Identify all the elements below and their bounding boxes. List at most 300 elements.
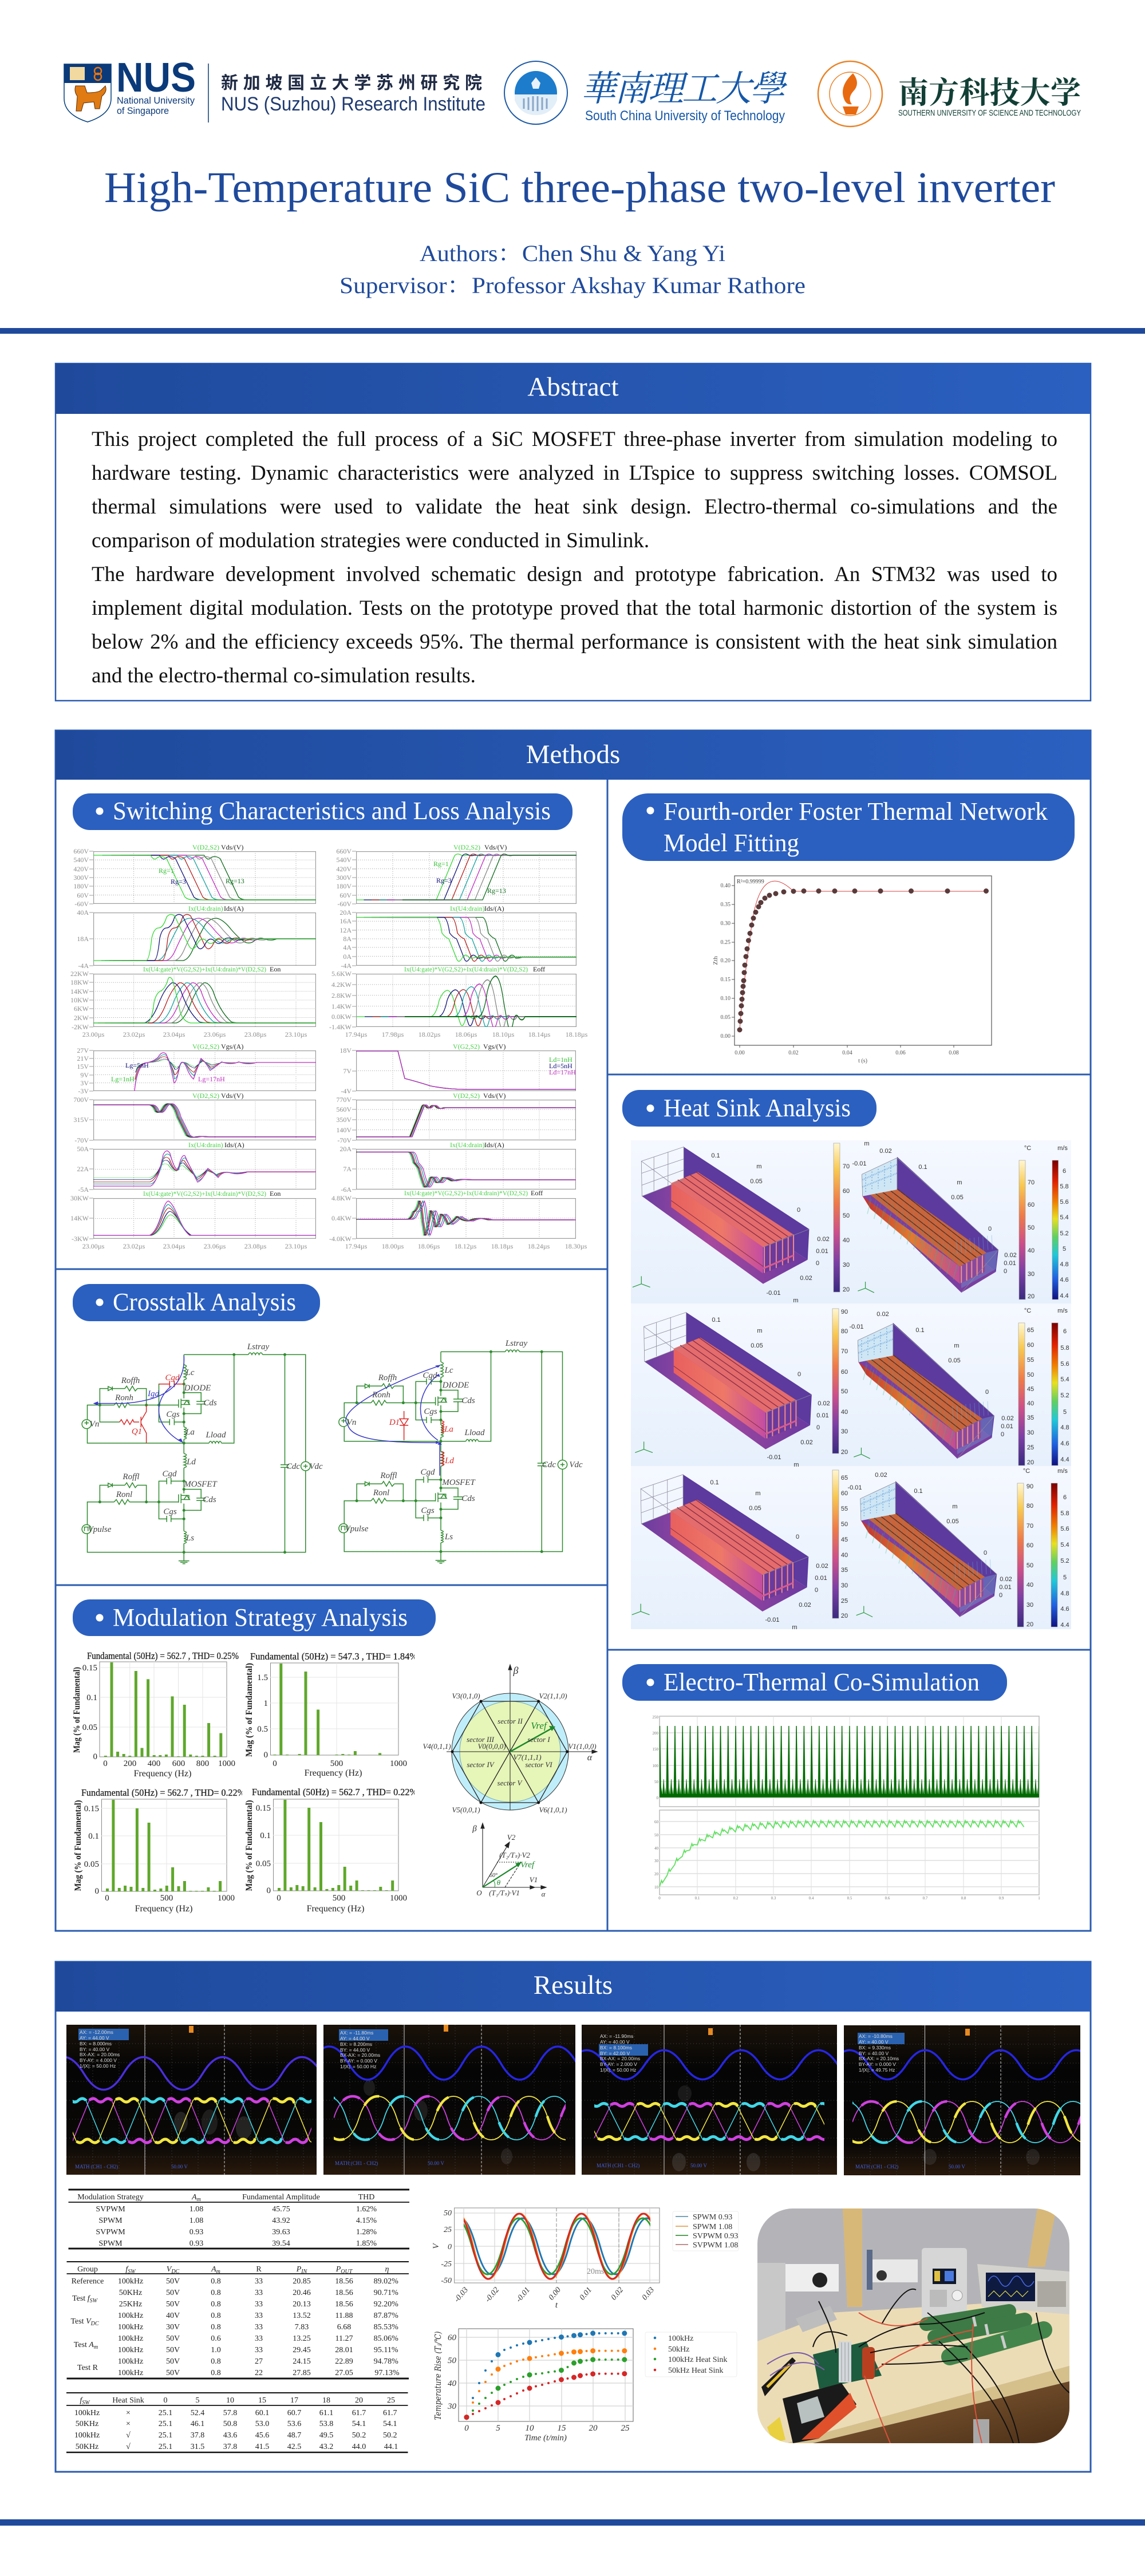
chart: turn-off waveforms vs Ld: Ids/(A)	[484, 1141, 504, 1149]
bar chart: harmonic spectrum 3: 0	[105, 1894, 109, 1903]
line chart: junction temperature rise: 0.9	[999, 1896, 1004, 1901]
table: modulation strategy comparison: Modulation Strategy	[77, 2193, 144, 2202]
table: efficiency test groups: V	[167, 2265, 172, 2274]
legend: modulation waveforms: SVPWM 0.93	[693, 2232, 738, 2241]
oscilloscope capture 1: BY-AY: = 4.000 V	[80, 2057, 117, 2063]
oscilloscope capture 4: BY-AY: = 0.000 V	[859, 2061, 896, 2067]
bar chart: harmonic spectrum 2: 500	[330, 1759, 343, 1768]
pill heading: Electro-Thermal Co-Simulation	[664, 1668, 980, 1696]
circuit diagram: left crosstalk path: Cgd	[162, 1469, 177, 1479]
figure: COMSOL heat sink simulations: 60	[841, 1490, 848, 1497]
circuit diagram: left crosstalk path: Ld	[186, 1457, 196, 1467]
oscilloscope capture 4: MATH (CH1 - CH2)	[855, 2164, 898, 2170]
oscilloscope capture 1: BX: = 8.000ms	[80, 2041, 112, 2046]
line chart: junction power losses: 100	[653, 1764, 658, 1768]
chart: turn-off waveforms vs Ld: 0.4KW	[331, 1214, 352, 1222]
table: temperature rise over time: 46.1	[191, 2420, 204, 2428]
chart: turn-off waveforms vs Ld: 7V	[343, 1067, 352, 1075]
oscilloscope capture 1	[66, 2025, 317, 2175]
figure: COMSOL heat sink simulations: 90	[1026, 1483, 1033, 1490]
chart: turn-off waveforms vs Rg: 17.94µs	[345, 1030, 368, 1038]
figure: COMSOL heat sink simulations: 0	[988, 1226, 992, 1232]
table: efficiency test groups: 1.0	[211, 2346, 221, 2354]
figure: COMSOL heat sink simulations: 0	[815, 1587, 818, 1594]
chart: turn-off waveforms vs Ld: -4.0KW	[329, 1235, 352, 1243]
title: High-Temperature SiC three-phase two-level inverter	[104, 164, 1055, 212]
figure: COMSOL heat sink simulations: °C	[1024, 1145, 1031, 1152]
oscilloscope capture 4	[844, 2025, 1080, 2175]
table: efficiency test groups: m	[216, 2269, 220, 2275]
chart: turn-off waveforms vs Rg: Ix(U4:drain)	[450, 904, 485, 912]
table: temperature rise over time: 0	[164, 2396, 167, 2405]
pill heading	[73, 1599, 436, 1636]
chart: turn-off waveforms vs Rg: 20A	[339, 908, 352, 916]
bar chart: harmonic spectrum 1: Frequency (Hz)	[134, 1769, 191, 1779]
subpanel: electro-thermal co-simulation	[622, 1664, 1040, 1901]
oscilloscope capture 3: BY: = 42.00 V	[600, 2050, 630, 2056]
table: efficiency test groups: 20.13	[293, 2300, 311, 2309]
text block: abstract: below 2% and the efficiency exceeds 95%. The thermal performance is consistent with the heat sink simulation	[92, 630, 1057, 654]
table: modulation strategy comparison: THD	[358, 2193, 374, 2202]
oscilloscope capture 2: 1/|X|: = 50.00 Hz	[340, 2064, 376, 2069]
table: temperature rise over time: 100kHz	[74, 2431, 100, 2440]
table: efficiency test groups: DC	[90, 2321, 99, 2327]
table: temperature rise over time: 5	[196, 2396, 199, 2405]
circuit diagram: right crosstalk path	[339, 1339, 583, 1563]
diagram: vector synthesis: 60°	[489, 1872, 498, 1879]
figure: COMSOL heat sink simulations: 45	[1027, 1386, 1034, 1393]
figure: COMSOL heat sink simulations: 0.02	[1004, 1252, 1017, 1259]
text block: abstract: hardware testing. Dynamic characteristics were analyzed in LTspice to suppress switching losses. COMSOL	[92, 461, 1057, 485]
diagram: space vector hexagon: V3(0,1,0)	[452, 1692, 480, 1700]
oscilloscope capture 2: BX: = 8.200ms	[340, 2041, 372, 2047]
diagram: vector synthesis: θ	[497, 1878, 501, 1887]
figure: COMSOL heat sink simulations: m	[954, 1342, 960, 1349]
figure: COMSOL heat sink simulations: 0	[816, 1424, 820, 1431]
text block: abstract: The hardware development involved schematic design and prototype fabrication. An STM32 was used to	[92, 563, 1057, 586]
oscilloscope capture 4: BX: = 9.330ms	[859, 2045, 891, 2050]
chart: turn-on waveforms vs Lg: 14KW	[70, 1214, 89, 1222]
figure: COMSOL heat sink simulations: 40	[843, 1237, 850, 1244]
table: modulation strategy comparison: 0.93	[189, 2239, 203, 2248]
chart: turn-off waveforms vs Ld: Ix(U4:gate)*V(G2,S2)+Ix(U4:drain)*V(D2,S2)	[404, 1189, 528, 1197]
chart: turn-off waveforms vs Rg: 8A	[343, 935, 352, 943]
figure: COMSOL heat sink simulations: 40	[841, 1409, 848, 1416]
circuit diagram: left crosstalk path: Vpulse	[88, 1525, 112, 1534]
figure: COMSOL heat sink simulations: m	[793, 1461, 799, 1468]
figure: COMSOL heat sink simulations: 25	[841, 1598, 848, 1605]
figure: COMSOL heat sink simulations: 0	[999, 1592, 1002, 1599]
wordmark: SUSTech Chinese name: 南方科技大学	[898, 69, 1081, 112]
line chart: junction temperature rise: 1	[1038, 1896, 1040, 1901]
bar chart: harmonic spectrum 3: 0	[95, 1887, 99, 1896]
bar chart: harmonic spectrum 1: 1000	[218, 1759, 235, 1768]
circuit diagram: right crosstalk path: Vdc	[569, 1460, 583, 1469]
figure: COMSOL heat sink simulations: -0.01	[765, 1617, 780, 1623]
figure: COMSOL heat sink simulations: 0.01	[815, 1575, 827, 1582]
table: temperature rise over time: 60.7	[287, 2409, 301, 2417]
chart: turn-off waveforms vs Rg	[329, 843, 634, 1038]
oscilloscope capture 3: BX-AX: = 20.00ms	[600, 2056, 640, 2061]
line chart: thermal impedance curve: 0.00	[720, 1033, 731, 1040]
table: efficiency test groups: 6.68	[337, 2323, 351, 2332]
oscilloscope capture 2: MATH (CH1 - CH2)	[335, 2160, 378, 2166]
circuit diagram: left crosstalk path: Cgd	[165, 1373, 180, 1382]
table: efficiency test groups: Test R	[77, 2364, 98, 2372]
chart: turn-off waveforms vs Rg: 18.06µs	[455, 1030, 477, 1038]
table: efficiency test groups: 85.53%	[374, 2323, 398, 2332]
figure: COMSOL heat sink simulations: 40	[841, 1552, 848, 1559]
line chart: phase voltage waveforms	[432, 2208, 693, 2310]
line chart: phase voltage waveforms: 0.01	[578, 2286, 594, 2302]
circuit diagram: left crosstalk path: Cds	[203, 1495, 216, 1504]
chart: turn-on waveforms vs Rg: Eon	[270, 965, 281, 973]
wordmark: institute English name: NUS (Suzhou) Research Institute	[221, 93, 485, 115]
chart: turn-off waveforms vs Ld: -4V	[341, 1087, 352, 1095]
oscilloscope capture 4: 50.00 V	[949, 2164, 965, 2170]
figure: COMSOL heat sink simulations: 5	[1063, 1409, 1067, 1416]
chart: turn-off waveforms vs Ld: 560V	[336, 1105, 352, 1113]
table: efficiency test groups: 13.25	[293, 2334, 311, 2343]
chart: turn-off waveforms vs Rg: V(D2,S2)	[453, 843, 480, 851]
figure: COMSOL heat sink simulations: 0.1	[915, 1327, 925, 1334]
table: efficiency test groups: 11.27	[335, 2334, 353, 2343]
line chart: thermal impedance curve: 0.25	[720, 939, 731, 946]
chart: turn-on waveforms vs Lg: -70V	[74, 1136, 89, 1144]
figure: COMSOL heat sink simulations: 70	[843, 1163, 850, 1170]
chart: turn-off waveforms vs Ld: Vgs/(V)	[483, 1042, 506, 1050]
circuit diagram: right crosstalk path: Lstray	[505, 1339, 528, 1348]
line chart: junction temperature rise: 0.8	[961, 1896, 966, 1901]
figure: COMSOL heat sink simulations: 0.02	[799, 1602, 811, 1609]
circuit diagram: right crosstalk path: Cgs	[421, 1506, 435, 1515]
pill heading: Model Fitting	[664, 829, 799, 857]
wordmark: NUS: NUS	[116, 55, 196, 101]
table: modulation strategy comparison: SPWM	[98, 2239, 123, 2248]
authors line: Authors：Chen Shu & Yang Yi	[420, 240, 725, 266]
circuit diagram: right crosstalk path: Cgd	[420, 1468, 435, 1477]
figure: COMSOL heat sink simulations: 0.01	[816, 1412, 829, 1419]
figure: COMSOL heat sink simulations: m/s	[1057, 1307, 1068, 1314]
scatter chart: temperature rise: 20	[589, 2424, 598, 2433]
circuit diagram: right crosstalk path: Vpulse	[345, 1524, 369, 1534]
line chart: junction temperature rise: 30	[654, 1859, 658, 1863]
chart: turn-off waveforms vs Rg: 17.98µs	[382, 1030, 404, 1038]
chart: turn-off waveforms vs Ld: 140V	[336, 1126, 352, 1134]
chart: turn-off waveforms vs Ld: 18.00µs	[382, 1242, 404, 1250]
figure: COMSOL heat sink simulations: 0.01	[816, 1248, 828, 1255]
line chart: junction temperature rise: 50	[654, 1833, 658, 1838]
chart: turn-off waveforms vs Rg: -1.4KW	[329, 1023, 352, 1031]
figure: COMSOL heat sink simulations: 70	[1026, 1523, 1033, 1530]
chart: turn-on waveforms vs Rg: 420V	[73, 865, 89, 873]
table: efficiency test groups: 94.78%	[374, 2357, 398, 2366]
chart: turn-on waveforms vs Rg: Vds/(V)	[221, 843, 243, 851]
table: efficiency test groups: 0.8	[211, 2312, 221, 2320]
line chart: thermal impedance curve: t (s)	[858, 1058, 867, 1064]
circuit diagram: left crosstalk path: Ronl	[116, 1490, 132, 1499]
table: temperature rise over time: 18	[322, 2396, 330, 2405]
diagram: space vector hexagon: Vref	[531, 1720, 548, 1731]
table: modulation strategy comparison: 1.08	[189, 2217, 203, 2225]
figure: COMSOL heat sink simulations: 4.4	[1060, 1622, 1069, 1629]
table: efficiency test groups: 22.89	[335, 2357, 353, 2366]
scatter chart: temperature rise: 50	[448, 2356, 457, 2365]
diagram: space vector hexagon: sector I	[527, 1735, 550, 1744]
chart: turn-off waveforms vs Ld: Ix(U4:drain)	[450, 1141, 485, 1149]
figure: COMSOL heat sink simulations: 0.1	[712, 1317, 721, 1323]
table: efficiency test groups: 29.45	[293, 2346, 311, 2354]
figure: COMSOL heat sink simulations: 55	[841, 1506, 848, 1512]
chart: turn-on waveforms vs Rg: -60V	[74, 900, 89, 908]
circuit diagram: right crosstalk path: D1	[389, 1418, 400, 1427]
oscilloscope capture 3: MATH (CH1 - CH2)	[597, 2163, 639, 2168]
scatter chart: temperature rise: 10	[526, 2424, 534, 2433]
circuit diagram: left crosstalk path: Lload	[205, 1431, 226, 1440]
line chart: junction temperature rise: 10	[654, 1885, 658, 1890]
chart: turn-off waveforms vs Ld: 7A	[343, 1165, 352, 1173]
chart: turn-off waveforms vs Rg: 0.0KW	[331, 1013, 352, 1021]
icon: NUS crest	[64, 64, 111, 122]
diagram: space vector hexagon: V7(1,1,1)	[513, 1753, 542, 1761]
figure: COMSOL heat sink simulations: 5.4	[1060, 1214, 1069, 1221]
figure: COMSOL heat sink simulations: 0.05	[948, 1357, 961, 1364]
table: efficiency test groups: SW	[90, 2298, 98, 2304]
figure: COMSOL heat sink simulations: m	[755, 1490, 761, 1497]
table: efficiency test groups: 13.52	[293, 2312, 311, 2320]
chart: turn-on waveforms vs Lg: 23.02µs	[123, 1242, 145, 1250]
table: efficiency test groups: R	[256, 2265, 262, 2274]
oscilloscope capture 1: 1/|X|: = 50.00 Hz	[80, 2063, 116, 2069]
subpanel: fourth-order Foster thermal network model fitting	[622, 793, 1075, 1064]
bar chart: harmonic spectrum 1: 800	[196, 1759, 209, 1768]
chart: turn-off waveforms vs Ld: V(G2,S2)	[453, 1042, 480, 1050]
panel: methods	[56, 730, 1091, 1931]
oscilloscope capture 1: BY: = 40.00 V	[80, 2046, 110, 2052]
table: efficiency test groups: P	[296, 2265, 302, 2274]
table: efficiency test groups: 24.15	[293, 2357, 311, 2366]
pill heading: Heat Sink Analysis	[664, 1094, 851, 1122]
chart: turn-off waveforms vs Ld	[329, 1042, 587, 1255]
bar chart: harmonic spectrum 4: 0.05	[256, 1859, 271, 1868]
figure: COMSOL heat sink simulations: °C	[1024, 1307, 1031, 1314]
figure: COMSOL heat sink simulations: 65	[1027, 1327, 1034, 1334]
figure: COMSOL heat sink simulations: 0.01	[1001, 1423, 1013, 1430]
table: temperature rise over time: 52.4	[191, 2409, 204, 2417]
bar chart: harmonic spectrum 1: 400	[148, 1759, 160, 1768]
figure: COMSOL heat sink simulations: 0.02	[800, 1439, 813, 1446]
figure: COMSOL heat sink simulations: 0	[797, 1207, 800, 1214]
chart: turn-on waveforms vs Lg: V(D2,S2)	[192, 1092, 219, 1100]
circuit diagram: right crosstalk path: Ronh	[372, 1390, 390, 1400]
oscilloscope capture 2: BX-AX: = 20.00ms	[340, 2052, 380, 2058]
text block: abstract: comparison of modulation strategies were conducted in Simulink.	[92, 529, 649, 552]
chart: turn-on waveforms vs Lg: 315V	[73, 1116, 89, 1124]
bar chart: harmonic spectrum 1	[72, 1650, 239, 1779]
bar chart: harmonic spectrum 3: 0.1	[88, 1832, 99, 1841]
diagram: space vector hexagon: sector VI	[525, 1760, 552, 1769]
table: efficiency test groups: 100kHz	[118, 2323, 143, 2332]
figure: COMSOL heat sink simulations: 4.6	[1060, 1606, 1069, 1613]
chart: turn-on waveforms vs Rg	[70, 843, 370, 1038]
figure: COMSOL heat sink simulations: 50	[843, 1212, 850, 1219]
subpanel: crosstalk analysis	[73, 1284, 583, 1564]
figure: COMSOL heat sink simulations: 4.4	[1060, 1456, 1069, 1463]
chart: turn-off waveforms vs Ld: 770V	[336, 1096, 352, 1104]
diagram: space vector hexagon: sector V	[498, 1779, 523, 1787]
figure: COMSOL heat sink simulations: 20	[1027, 1459, 1034, 1466]
figure: COMSOL heat sink simulations: 5.8	[1060, 1510, 1069, 1517]
oscilloscope capture 1: AX: = -12.00ms	[80, 2029, 113, 2035]
table: efficiency test groups: 0.8	[211, 2357, 221, 2366]
line chart: phase voltage waveforms: 0.02	[610, 2286, 625, 2302]
diagram: space vector hexagon: V0(0,0,0)	[477, 1742, 506, 1751]
chart: turn-on waveforms vs Rg: 60V	[77, 891, 89, 899]
chart: turn-off waveforms vs Rg: 18.10µs	[492, 1030, 515, 1038]
oscilloscope capture 2: AX: = -11.80ms	[340, 2030, 373, 2036]
table: temperature rise over time: 41.5	[255, 2443, 269, 2451]
bar chart: harmonic spectrum 2: 0	[273, 1759, 277, 1768]
bar chart: harmonic spectrum 1: 0.05	[82, 1723, 97, 1732]
table: efficiency test groups: 85.06%	[374, 2334, 398, 2343]
circuit diagram: right crosstalk path: Ls	[444, 1532, 453, 1542]
table: efficiency test groups: 95.11%	[374, 2346, 398, 2354]
line chart: phase voltage waveforms: -0.02	[484, 2286, 501, 2304]
table: efficiency test groups: 0.8	[211, 2369, 221, 2377]
figure: COMSOL heat sink simulations: m	[864, 1140, 870, 1147]
circuit diagram: left crosstalk path: Ronh	[114, 1393, 133, 1402]
table: efficiency test groups: 100kHz	[118, 2277, 143, 2286]
figure: COMSOL heat sink simulations: 40	[1028, 1247, 1035, 1254]
figure: COMSOL heat sink simulations: 0.05	[750, 1178, 763, 1185]
chart: turn-on waveforms vs Lg: Ix(U4:drain)	[188, 1141, 223, 1149]
table: efficiency test groups: P	[335, 2265, 341, 2274]
figure: COMSOL heat sink simulations: 0	[1001, 1431, 1004, 1438]
figure: COMSOL heat sink simulations: 55	[1027, 1357, 1034, 1364]
bar chart: harmonic spectrum 3: Mag (% of Fundamental)	[73, 1800, 83, 1891]
figure: COMSOL heat sink simulations: 80	[841, 1328, 848, 1335]
chart: turn-on waveforms vs Lg: 50A	[77, 1145, 89, 1153]
table: efficiency test groups: 18.56	[335, 2289, 353, 2297]
oscilloscope capture 3	[582, 2025, 837, 2175]
table: modulation strategy comparison	[69, 2190, 409, 2249]
table: temperature rise over time: Heat Sink	[112, 2396, 144, 2405]
text block: abstract	[92, 428, 1057, 688]
chart: turn-on waveforms vs Rg: Rg=13	[226, 877, 244, 885]
table: efficiency test groups: 33	[255, 2289, 263, 2297]
chart: turn-off waveforms vs Ld: V(D2,S2)	[453, 1092, 480, 1100]
line chart: phase voltage waveforms: -0.03	[453, 2286, 470, 2304]
table: temperature rise over time: 10	[226, 2396, 234, 2405]
table: temperature rise over time: ×	[126, 2409, 131, 2417]
photo: hardware test bench	[757, 2208, 1069, 2443]
bar chart: harmonic spectrum 4: 0	[277, 1894, 281, 1903]
legend: temperature series: 100kHz	[668, 2334, 693, 2343]
bar chart: harmonic spectrum 1: 0.1	[86, 1693, 97, 1702]
line chart: junction temperature rise: 60	[654, 1820, 658, 1824]
logo: South China University of Technology	[504, 60, 788, 124]
figure: COMSOL heat sink simulations	[631, 1140, 1071, 1631]
bar chart: harmonic spectrum 2: Frequency (Hz)	[305, 1768, 362, 1778]
chart: turn-on waveforms vs Lg: 27V	[77, 1046, 89, 1054]
table: temperature rise over time: 43.6	[223, 2431, 237, 2440]
legend: modulation waveforms: SVPWM 1.08	[693, 2241, 738, 2250]
chart: turn-on waveforms vs Rg: 180V	[73, 882, 89, 890]
figure: COMSOL heat sink simulations: m	[756, 1163, 762, 1170]
table: efficiency test groups: 27.05	[335, 2369, 353, 2377]
table: efficiency test groups: IN	[301, 2269, 308, 2275]
table: temperature rise over time: 15	[258, 2396, 266, 2405]
circuit diagram: right crosstalk path: Cds	[461, 1494, 475, 1503]
bar chart: harmonic spectrum 2: 0	[263, 1751, 268, 1760]
scatter chart: temperature rise: 40	[448, 2379, 457, 2388]
table: efficiency test groups: 33	[255, 2312, 263, 2320]
legend: temperature series: 100kHz Heat Sink	[668, 2356, 727, 2364]
figure: COMSOL heat sink simulations: 20	[841, 1449, 848, 1456]
table: efficiency test groups: 50V	[166, 2369, 180, 2377]
chart: turn-on waveforms vs Rg: 23.10µs	[285, 1030, 307, 1038]
table: efficiency test groups: 89.02%	[374, 2277, 398, 2286]
table: efficiency test groups: 100kHz	[118, 2312, 143, 2320]
diagram: space vector hexagon: V1(1,0,0)	[568, 1742, 597, 1751]
chart: turn-off waveforms vs Ld: 4.8KW	[331, 1194, 352, 1202]
figure: COMSOL heat sink simulations: 6	[1063, 1494, 1067, 1501]
chart: turn-off waveforms vs Rg: Rg=1	[433, 860, 449, 868]
figure: COMSOL heat sink simulations: 4.6	[1060, 1440, 1069, 1447]
diagram: vector synthesis: V1	[530, 1875, 538, 1884]
supervisor line: Supervisor：Professor Akshay Kumar Rathore	[339, 272, 806, 298]
diagram: space vector hexagon: V2(1,1,0)	[539, 1692, 567, 1700]
table: efficiency test groups: 33	[255, 2323, 263, 2332]
table: temperature rise over time: 53.6	[287, 2420, 301, 2428]
circuit diagram: left crosstalk path: Cgs	[166, 1410, 180, 1419]
figure: COMSOL heat sink simulations: 5.4	[1060, 1376, 1069, 1383]
chart: turn-on waveforms vs Lg: 23.06µs	[204, 1242, 226, 1250]
bar chart: harmonic spectrum 2: 1.5	[257, 1673, 268, 1682]
panel: abstract	[56, 364, 1091, 701]
figure: COMSOL heat sink simulations: 0.02	[818, 1400, 830, 1407]
text block: abstract: implement digital modulation. Tests on the prototype proved that the total harmonic distortion of the system is	[92, 596, 1057, 620]
table: efficiency test groups: Group	[77, 2265, 98, 2274]
bar chart: harmonic spectrum 4: 0.1	[260, 1831, 271, 1840]
table: temperature rise over time: √	[126, 2431, 131, 2440]
figure: COMSOL heat sink simulations: 5.8	[1060, 1183, 1069, 1190]
figure: COMSOL heat sink simulations: 0.05	[751, 1342, 763, 1349]
chart: turn-off waveforms vs Ld: 18.06µs	[418, 1242, 440, 1250]
chart: turn-on waveforms vs Rg: 540V	[73, 856, 89, 864]
bar chart: harmonic spectrum 4: Mag (% of Fundamental)	[244, 1800, 254, 1891]
table: temperature rise over time: f	[80, 2396, 83, 2405]
logo: NUS Suzhou Research Institute	[64, 55, 485, 123]
line chart: thermal impedance curve: 0.20	[720, 958, 731, 964]
table: efficiency test groups: 27	[255, 2357, 263, 2366]
chart: turn-on waveforms vs Rg: V(D2,S2)	[192, 843, 219, 851]
wordmark: institute Chinese name: 新加坡国立大学苏州研究院	[221, 69, 482, 94]
heading: Abstract: Abstract	[527, 372, 619, 402]
chart: turn-on waveforms vs Lg: Lg=5nH	[125, 1061, 149, 1069]
table: efficiency test groups: 22	[255, 2369, 263, 2377]
chart: turn-on waveforms vs Rg: 10KW	[70, 996, 89, 1004]
line chart: junction temperature rise	[654, 1810, 1040, 1901]
chart: turn-on waveforms vs Rg: Rg=3	[171, 878, 186, 886]
line chart: thermal impedance curve: 0.08	[949, 1050, 959, 1056]
chart: turn-off waveforms vs Rg: 5.6KW	[331, 970, 352, 978]
circuit diagram: left crosstalk path	[82, 1342, 323, 1564]
figure: COMSOL heat sink simulations: 0.02	[879, 1148, 892, 1155]
figure: COMSOL heat sink simulations: -0.01	[852, 1160, 867, 1167]
figure: COMSOL heat sink simulations: 6	[1063, 1168, 1066, 1175]
chart: turn-on waveforms vs Lg: 23.04µs	[163, 1242, 185, 1250]
